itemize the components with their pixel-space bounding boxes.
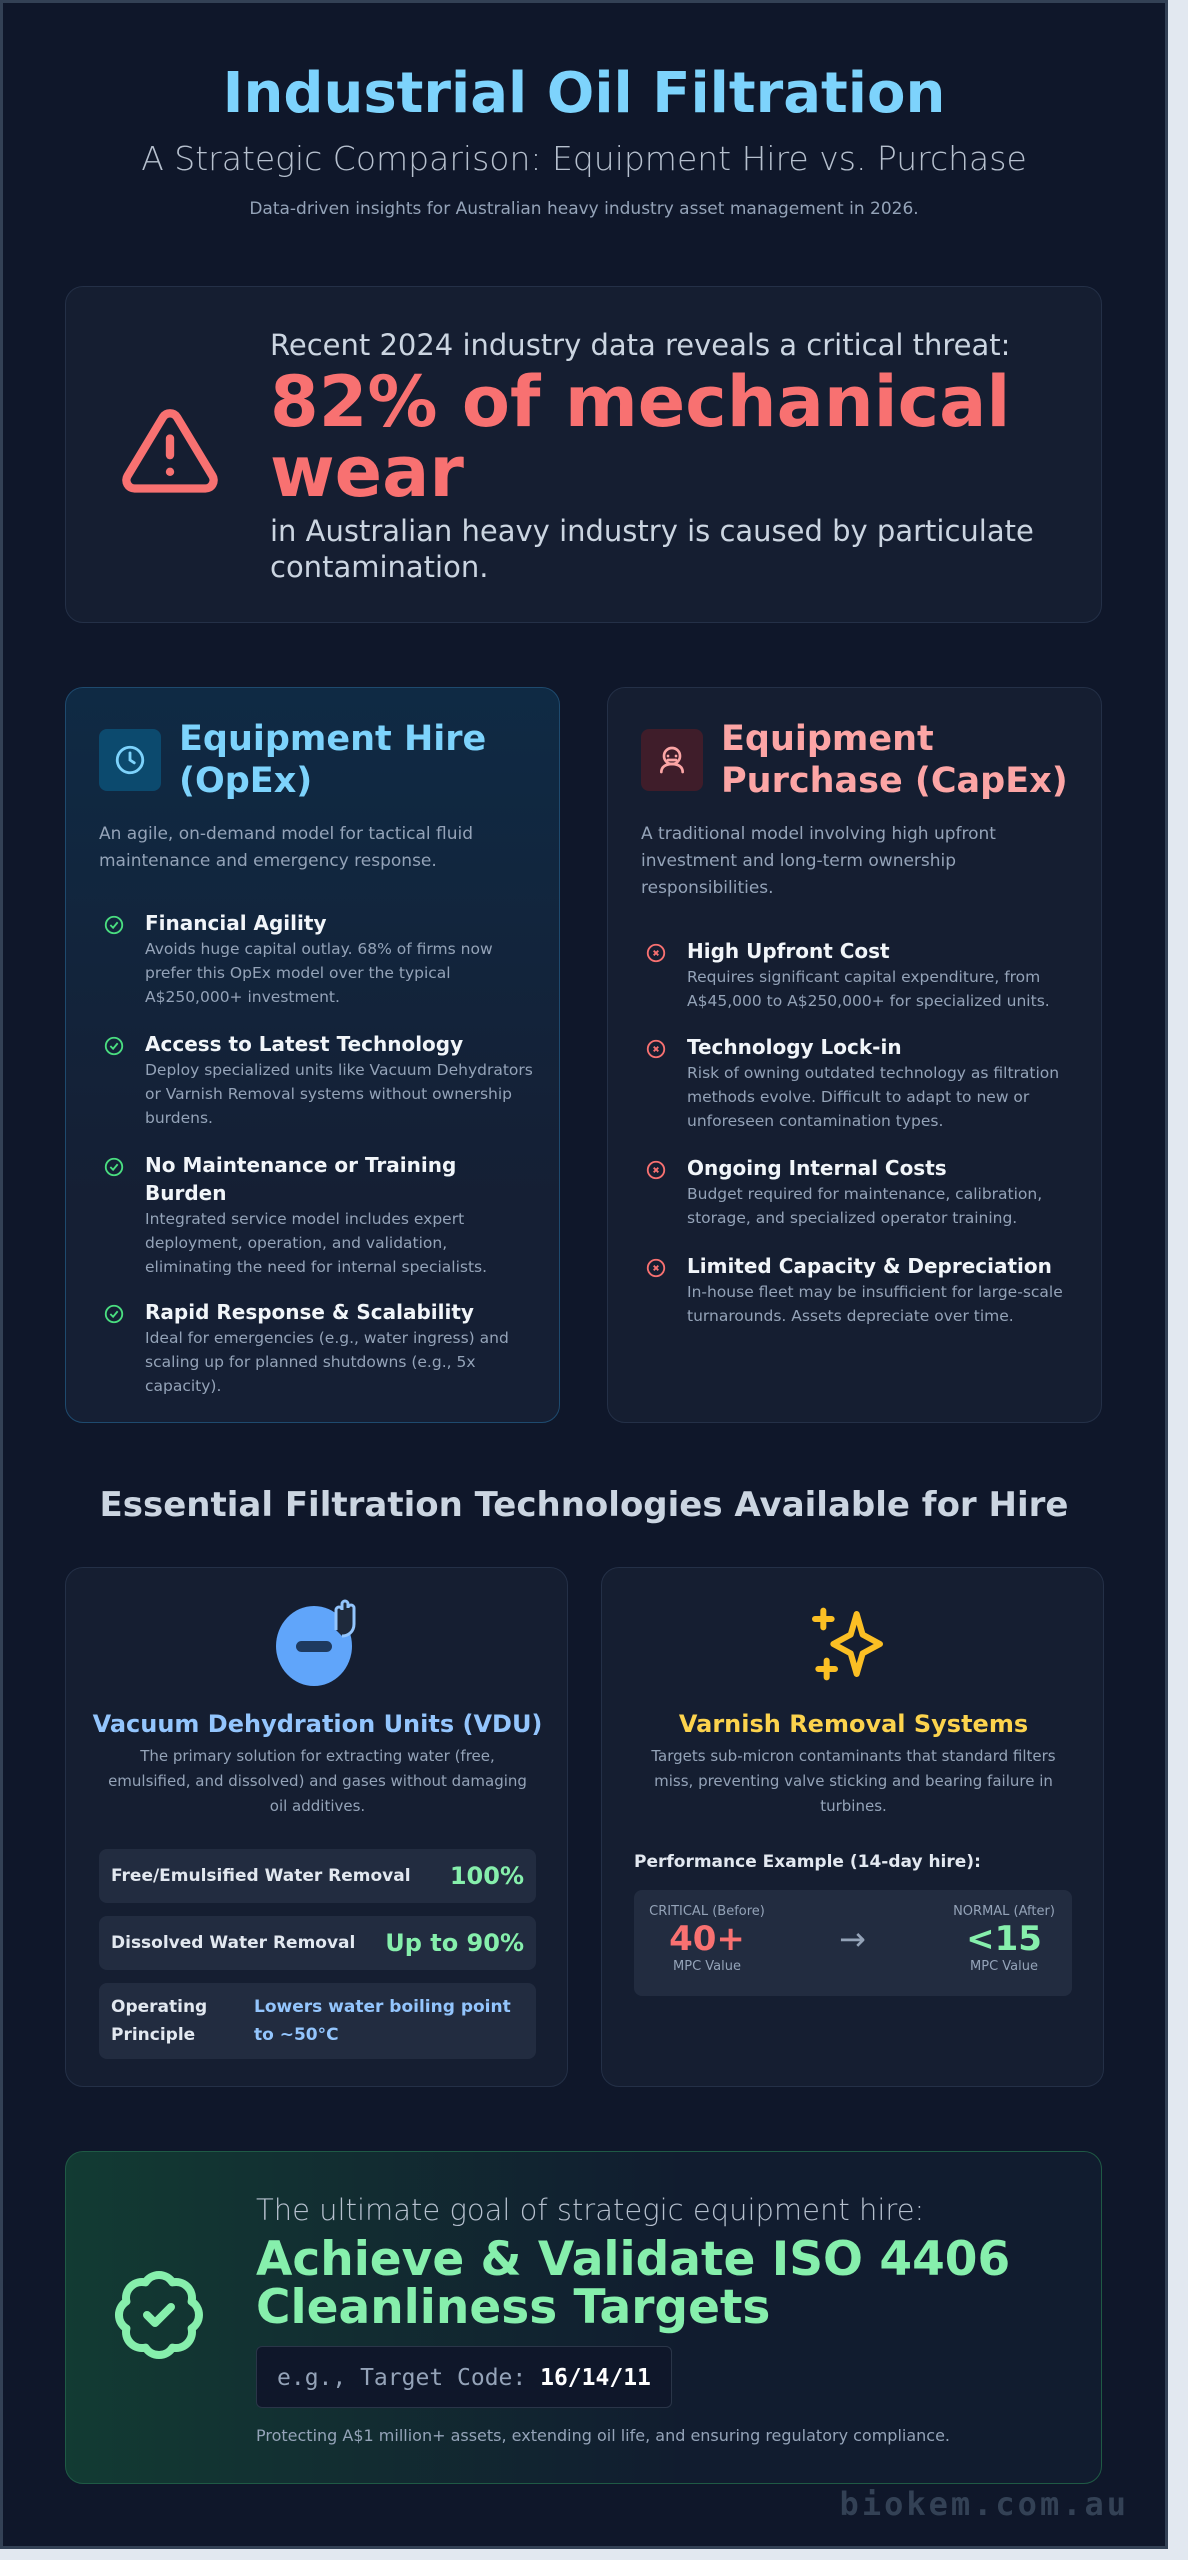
heading bbox=[179, 719, 486, 801]
item: high cost: High Upfront Cost bbox=[687, 939, 890, 963]
item: capacity: Limited Capacity & Depreciation bbox=[687, 1254, 1052, 1278]
icon: VDU bbox=[276, 1600, 356, 1686]
item: lock-in: Risk of owning outdated technology as filtration methods evolve. Difficult to adapt to new or unforeseen contamination types. bbox=[687, 1064, 1059, 1130]
before value: CRITICAL (Before) bbox=[649, 1904, 765, 1919]
item: financial agility: Financial Agility bbox=[145, 911, 326, 935]
stat: operating principle: Operating Principle bbox=[111, 1997, 207, 2045]
title: Industrial Oil Filtration bbox=[223, 61, 945, 126]
item: internal costs bbox=[646, 1156, 1042, 1227]
item: internal costs: Ongoing Internal Costs bbox=[687, 1156, 947, 1180]
icon: badge check bbox=[114, 2271, 203, 2359]
stat: dissolved water bbox=[99, 1916, 536, 1970]
description: An agile, on-demand model for tactical fluid maintenance and emergency response. bbox=[99, 824, 473, 871]
stat: free water: Free/Emulsified Water Removal bbox=[111, 1866, 411, 1886]
code box: e.g., Target Code: 16/14/11 bbox=[277, 2365, 651, 2391]
item: internal costs: Budget required for maintenance, calibration, storage, and specialized operator training. bbox=[687, 1185, 1042, 1227]
item: no maintenance: No Maintenance or Training Burden bbox=[145, 1153, 456, 1205]
after value: NORMAL (After) bbox=[953, 1904, 1055, 1919]
after value bbox=[953, 1904, 1055, 1974]
panel: equipment purchase bbox=[607, 687, 1102, 1423]
heading bbox=[721, 719, 1068, 801]
heading: Vacuum Dehydration Units (VDU) bbox=[93, 1710, 542, 1738]
arrow: → bbox=[839, 1920, 866, 1958]
item: financial agility: Avoids huge capital outlay. 68% of firms now prefer this OpEx model over the typical A$250,000+ investment. bbox=[145, 940, 493, 1006]
panel: ISO goal bbox=[65, 2151, 1102, 2484]
before value: MPC Value bbox=[673, 1959, 741, 1974]
after value: <15 bbox=[966, 1919, 1042, 1959]
section heading: Essential Filtration Technologies Available for Hire bbox=[100, 1485, 1068, 1525]
description: Targets sub-micron contaminants that standard filters miss, preventing valve sticking and bearing failure in turbines. bbox=[651, 1747, 1056, 1815]
before value bbox=[649, 1904, 765, 1974]
item: rapid response: Ideal for emergencies (e.g., water ingress) and scaling up for planned shutdowns (e.g., 5x capacity). bbox=[145, 1329, 509, 1395]
stat: free water bbox=[99, 1849, 536, 1903]
item: no maintenance bbox=[104, 1153, 487, 1276]
intro text: Data-driven insights for Australian heavy industry asset management in 2026. bbox=[249, 199, 919, 219]
item: capacity: In-house fleet may be insufficient for large-scale turnarounds. Assets depreciate over time. bbox=[687, 1283, 1063, 1325]
icon: clock bbox=[99, 729, 161, 791]
description: The primary solution for extracting water (free, emulsified, and dissolved) and gases without damaging oil additives. bbox=[108, 1747, 527, 1815]
icon: warning triangle bbox=[122, 409, 218, 493]
item: high cost bbox=[646, 939, 1050, 1010]
before/after comparison bbox=[634, 1890, 1072, 1996]
item: financial agility bbox=[104, 911, 493, 1006]
stat text: in Australian heavy industry is caused by particulate contamination. bbox=[270, 514, 1034, 584]
goal text: Achieve & Validate ISO 4406 Cleanliness Targets bbox=[256, 2232, 1010, 2335]
icon: purchase bbox=[641, 729, 703, 791]
item: lock-in: Technology Lock-in bbox=[687, 1035, 902, 1059]
item: latest technology: Deploy specialized units like Vacuum Dehydrators or Varnish Removal systems without ownership burdens. bbox=[145, 1061, 533, 1127]
stat: free water: 100% bbox=[450, 1862, 524, 1890]
goal text: Protecting A$1 million+ assets, extending oil life, and ensuring regulatory compliance. bbox=[256, 2426, 950, 2445]
goal text: The ultimate goal of strategic equipment hire: bbox=[256, 2193, 924, 2227]
subtitle: A Strategic Comparison: Equipment Hire vs. Purchase bbox=[141, 139, 1027, 178]
panel: varnish removal bbox=[601, 1567, 1104, 2087]
footer brand: biokem.com.au bbox=[840, 2485, 1129, 2523]
item: rapid response: Rapid Response & Scalability bbox=[145, 1300, 474, 1324]
heading: Purchase (CapEx) bbox=[721, 761, 1068, 801]
heading: Equipment Hire bbox=[179, 719, 486, 759]
goal text bbox=[256, 2193, 1010, 2445]
item: latest technology bbox=[104, 1032, 533, 1127]
stat text: Recent 2024 industry data reveals a critical threat: bbox=[270, 328, 1010, 362]
icon: sparkles bbox=[812, 1608, 883, 1680]
stat text bbox=[270, 328, 1034, 584]
panel: alert stat bbox=[65, 286, 1102, 623]
heading: Equipment bbox=[721, 719, 934, 759]
item: latest technology: Access to Latest Technology bbox=[145, 1032, 463, 1056]
drawbacks list bbox=[646, 939, 1063, 1325]
item: capacity bbox=[646, 1254, 1063, 1325]
stat text: 82% of mechanical wear bbox=[270, 361, 1010, 513]
stat: dissolved water: Up to 90% bbox=[385, 1929, 524, 1957]
stat: operating principle bbox=[99, 1983, 536, 2059]
item: rapid response bbox=[104, 1300, 509, 1395]
panel: equipment hire bbox=[65, 687, 560, 1423]
before value: 40+ bbox=[669, 1919, 745, 1959]
description: A traditional model involving high upfront investment and long-term ownership responsibilities. bbox=[641, 824, 996, 898]
panel: VDU bbox=[65, 1567, 568, 2087]
heading: (OpEx) bbox=[179, 761, 312, 801]
item: high cost: Requires significant capital expenditure, from A$45,000 to A$250,000+ for specialized units. bbox=[687, 968, 1050, 1010]
after value: MPC Value bbox=[970, 1959, 1038, 1974]
heading: Varnish Removal Systems bbox=[679, 1710, 1028, 1738]
code box bbox=[256, 2346, 672, 2408]
benefits list bbox=[104, 911, 533, 1395]
performance label: Performance Example (14-day hire): bbox=[634, 1852, 981, 1872]
stat: dissolved water: Dissolved Water Removal bbox=[111, 1933, 355, 1953]
stat: operating principle: Lowers water boiling point to ~50°C bbox=[254, 1997, 511, 2045]
item: lock-in bbox=[646, 1035, 1059, 1130]
item: no maintenance: Integrated service model includes expert deployment, operation, and validation, eliminating the need for internal specialists. bbox=[145, 1210, 487, 1276]
